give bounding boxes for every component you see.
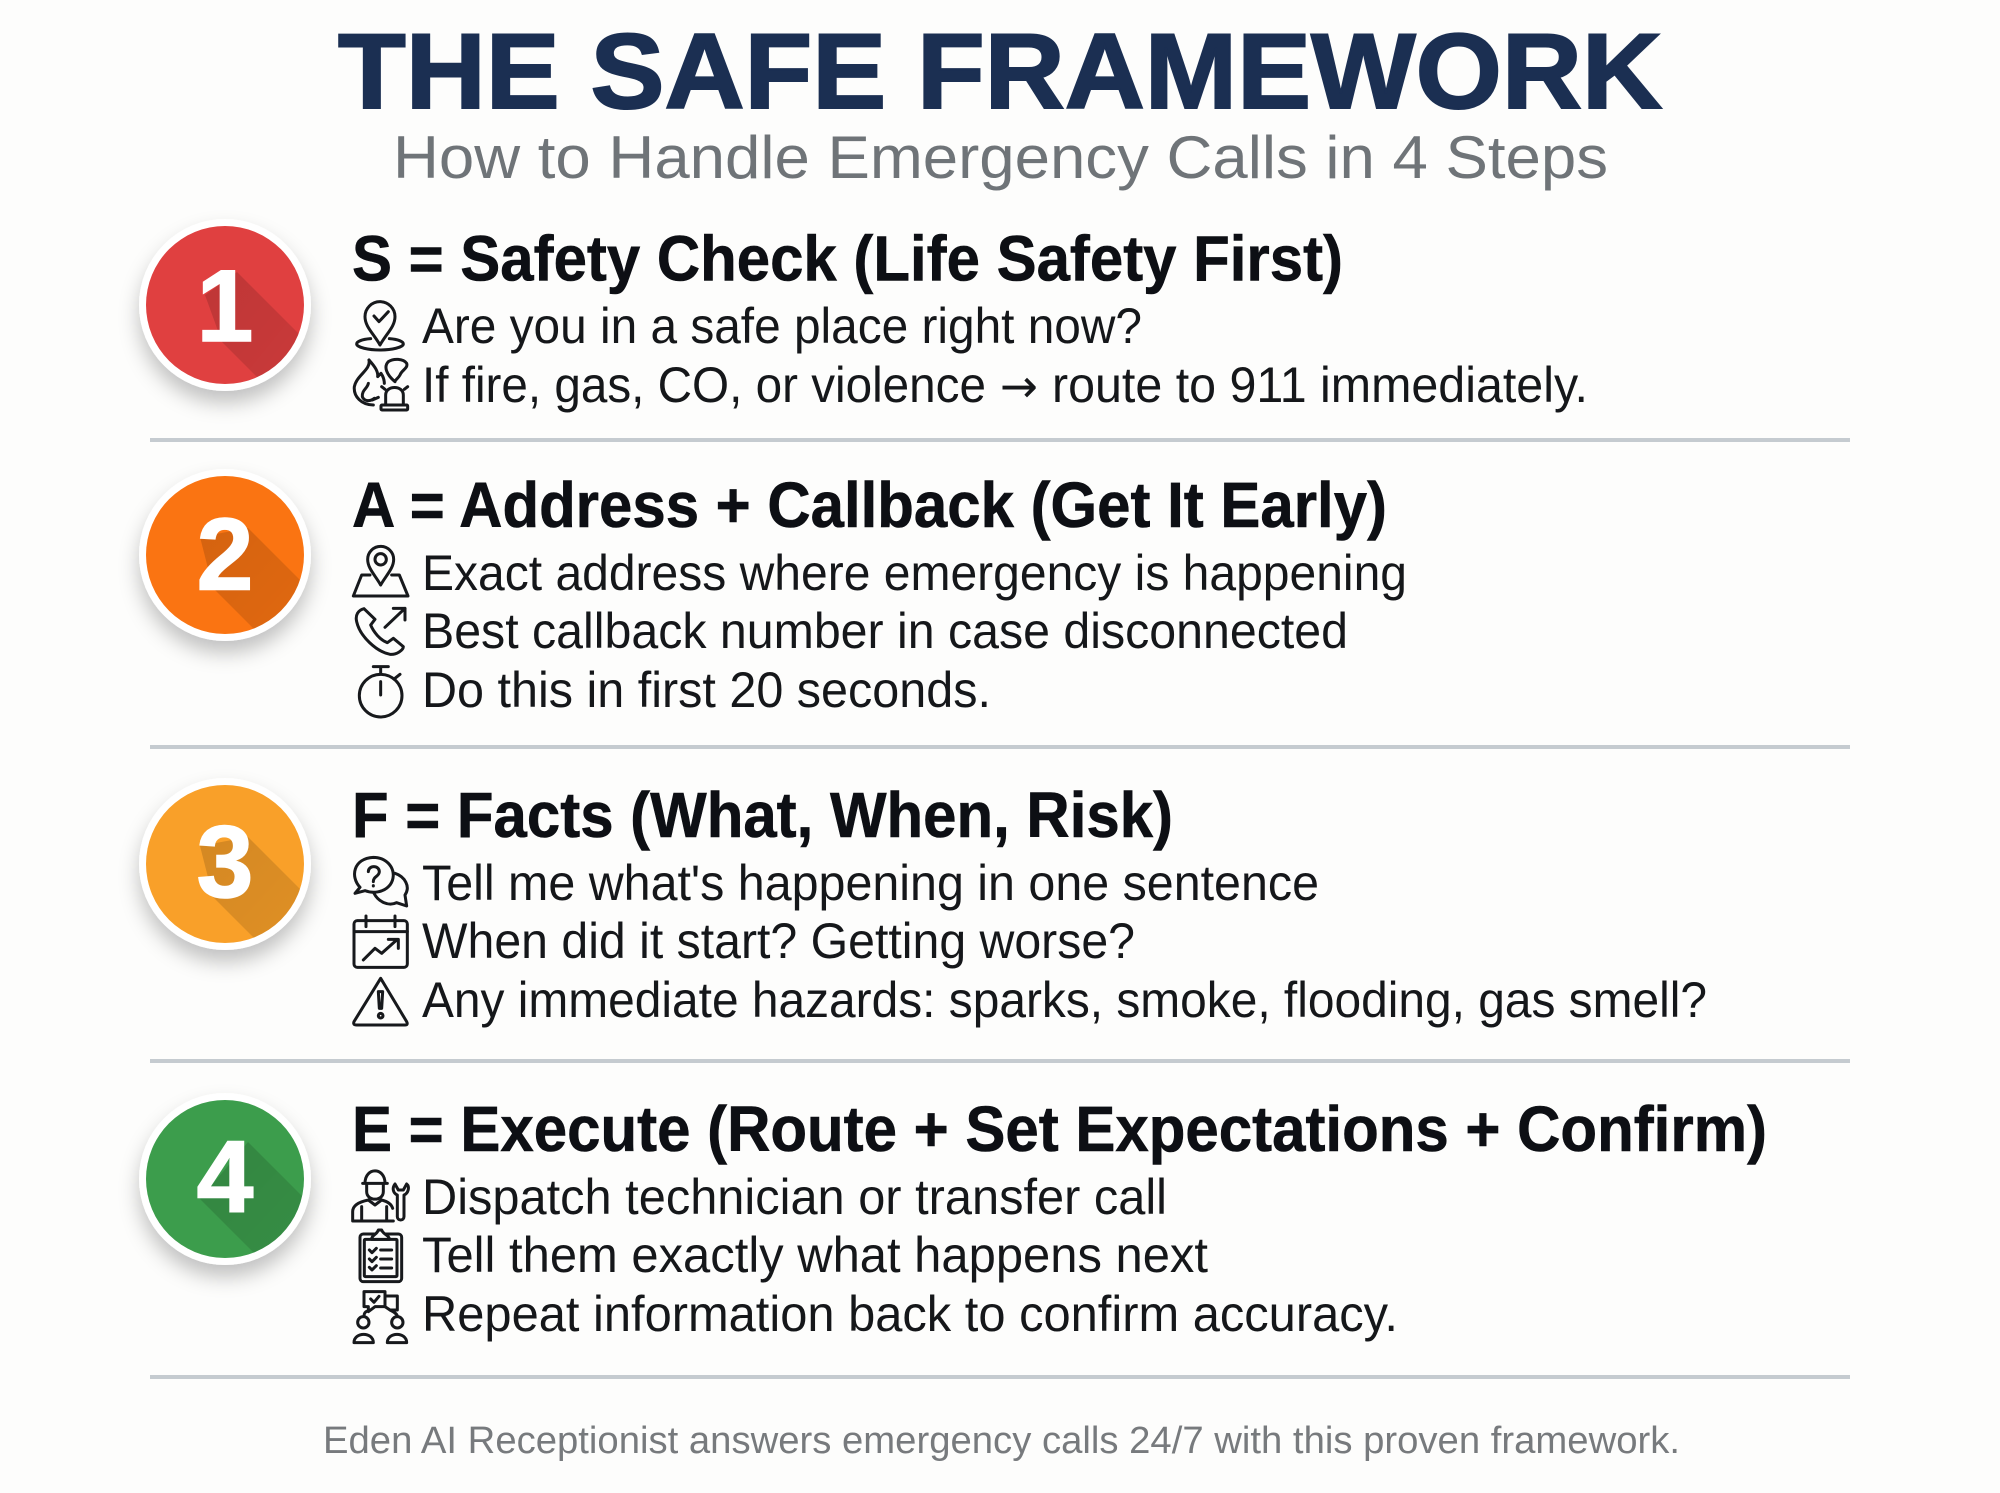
icon: technician <box>353 1171 408 1221</box>
badge 2: 2 <box>197 498 253 612</box>
badge 4 <box>129 1100 321 1287</box>
badge 1 <box>129 226 321 413</box>
text: route to 911: route to 911 immediately. <box>1052 357 1588 413</box>
icon: phone callback <box>356 608 405 654</box>
text: route to 911 <box>422 357 1588 413</box>
icon: location pin check <box>357 302 403 350</box>
icon: question bubbles <box>355 857 407 906</box>
text: dispatch: Dispatch technician or transfer call <box>422 1169 1167 1225</box>
subtitle: How to Handle Emergency Calls in 4 Steps <box>393 124 1608 191</box>
text: callback number: Best callback number in case disconnected <box>422 603 1348 659</box>
text: exact address: Exact address where emergency is happening <box>422 545 1407 601</box>
text: safe place: Are you in a safe place right now? <box>422 298 1142 354</box>
text: when start: When did it start? Getting worse? <box>422 913 1135 969</box>
badge 2 <box>129 476 321 663</box>
panel: step 2 address callback <box>139 469 1407 718</box>
text: first 20 seconds: Do this in first 20 seconds. <box>422 662 991 718</box>
text: route to 911: If fire, gas, CO, or violence <box>422 357 986 413</box>
heading S: S = Safety Check (Life Safety First) <box>352 222 1343 294</box>
heading E: E = Execute (Route + Set Expectations + Confirm) <box>352 1093 1767 1165</box>
title: THE SAFE FRAMEWORK <box>338 11 1662 131</box>
icon: map pin <box>353 546 408 596</box>
panel: step 3 facts <box>139 778 1707 1028</box>
heading A: A = Address + Callback (Get It Early) <box>352 469 1387 541</box>
icon: clipboard <box>360 1230 402 1282</box>
text: what happens next: Tell them exactly what happens next <box>422 1227 1208 1283</box>
icon: stopwatch <box>359 667 402 717</box>
footer text: Eden AI Receptionist answers emergency calls 24/7 with this proven framework. <box>323 1420 1680 1462</box>
text: route to 911: → <box>1000 359 1038 413</box>
badge 3 <box>129 785 321 972</box>
heading F: F = Facts (What, When, Risk) <box>352 779 1173 851</box>
panel: step 1 safety check <box>129 226 1584 413</box>
icon: fire smoke siren <box>354 359 408 410</box>
icon: warning triangle <box>354 978 407 1025</box>
icon: calendar trend <box>354 916 407 967</box>
text: hazards: Any immediate hazards: sparks, smoke, flooding, gas smell? <box>422 972 1707 1028</box>
panel: step 4 execute <box>139 1093 1767 1343</box>
badge 4: 4 <box>197 1120 254 1234</box>
icon: people confirming <box>354 1292 407 1343</box>
text: what's happening: Tell me what's happening in one sentence <box>422 855 1319 911</box>
text: repeat information: Repeat information back to confirm accuracy. <box>422 1286 1398 1342</box>
badge 1: 1 <box>197 249 253 363</box>
badge 3: 3 <box>197 805 253 919</box>
